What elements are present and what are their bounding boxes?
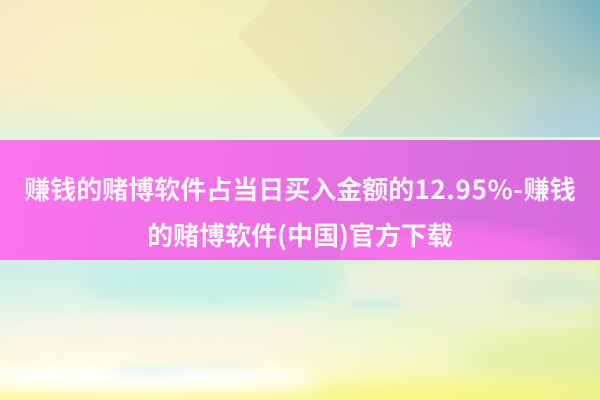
title: 的赌博软件(中国)官方下载 bbox=[147, 216, 453, 253]
title bbox=[24, 170, 576, 253]
title: 赚钱的赌博软件占当日买入金额的12.95%-赚钱 bbox=[24, 170, 576, 207]
banner: pink title band bbox=[0, 140, 600, 260]
